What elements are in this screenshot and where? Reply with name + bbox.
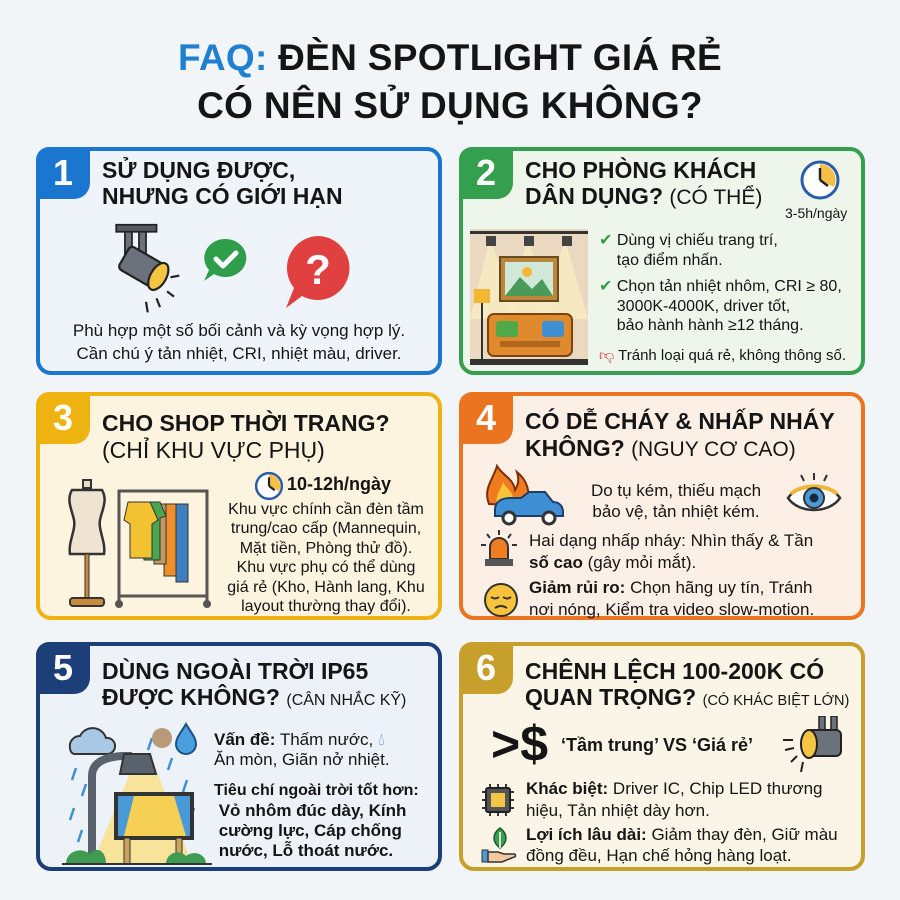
text 3: trung/cao cấp (Mannequin, — [231, 520, 421, 537]
text: differences: hiệu, Tản nhiệt dày hơn. — [526, 801, 710, 820]
text: reduce risk: Giảm rủi ro: Chọn hãng uy tín, Tránh — [529, 578, 812, 597]
text: criteria: Tiêu chí ngoài trời tốt hơn: — [214, 782, 419, 799]
heading 3: CHO SHOP THỜI TRANG? — [102, 410, 390, 436]
badge 1: 1 — [53, 152, 73, 193]
icon: clock small — [254, 472, 284, 500]
text: differences: Khác biệt: Driver IC, Chip LED thương — [526, 779, 823, 798]
icon: burning car — [486, 464, 564, 526]
bullet: specs — [599, 278, 842, 334]
text 3: layout thường thay đổi). — [241, 598, 411, 615]
icon: red question bubble: ? — [305, 246, 331, 293]
icon: spotlight small — [783, 716, 842, 772]
bullet: specs: bảo hành hành ≥12 tháng. — [617, 317, 804, 334]
text 3: Mặt tiền, Phòng thử đồ). — [240, 540, 412, 557]
text: reduce risk: nơi nóng, Kiểm tra video slow-motion. — [529, 600, 814, 619]
illustration: living room — [470, 229, 588, 365]
text: cause: Do tụ kém, thiếu mạch — [591, 481, 761, 500]
heading 3 — [102, 410, 390, 463]
heading 5: DÙNG NGOÀI TRỜI IP65 — [102, 658, 368, 684]
bullet: avoid: 👎︎ Tránh loại quá rẻ, không thông số. — [599, 347, 846, 364]
heading 3: (CHỈ KHU VỰC PHỤ) — [102, 437, 325, 463]
text 3 — [227, 501, 425, 615]
heading 1: NHƯNG CÓ GIỚI HẠN — [102, 183, 343, 209]
badge 3: 3 — [53, 397, 73, 438]
heading 4: KHÔNG? (NGUY CƠ CAO) — [525, 435, 796, 461]
text: cause: bảo vệ, tản nhiệt kém. — [592, 502, 760, 521]
title — [178, 36, 722, 126]
heading 5 — [102, 658, 406, 710]
title: FAQ: ĐÈN SPOTLIGHT GIÁ RẺ — [178, 37, 722, 78]
panel 5: outdoor IP65 — [36, 642, 442, 871]
icon: spotlight — [115, 224, 180, 312]
text: reduce risk — [529, 578, 814, 619]
text 1: Phù hợp một số bối cảnh và kỳ vọng hợp lý. — [73, 321, 405, 340]
text: problems: Ăn mòn, Giãn nở nhiệt. — [214, 750, 390, 769]
panel 6: price difference — [459, 642, 865, 871]
text 3: Khu vực chính cần đèn tầm — [228, 501, 424, 518]
heading 2 — [525, 157, 762, 209]
text 1 — [73, 321, 405, 363]
badge 1 — [36, 147, 90, 199]
bullet: specs: 3000K-4000K, driver tốt, — [617, 298, 790, 314]
badge 4: 4 — [476, 397, 496, 438]
clock label: 3-5h/ngày — [785, 205, 847, 221]
badge 4 — [459, 392, 513, 444]
hours label: 10-12h/ngày — [287, 474, 391, 494]
text: criteria — [214, 782, 419, 860]
heading 4 — [525, 408, 835, 461]
icon: green check bubble — [204, 239, 246, 281]
icon: tired face — [484, 583, 518, 617]
badge 2: 2 — [476, 152, 496, 193]
bullet: specs: ✔ Chọn tản nhiệt nhôm, CRI ≥ 80, — [599, 278, 842, 295]
panel 2: living room — [459, 147, 865, 375]
icon: clothes rack — [115, 490, 211, 608]
badge 5 — [36, 642, 90, 694]
heading 4: CÓ DỄ CHÁY & NHẤP NHÁY — [525, 408, 835, 434]
illustration: outdoor lamp in rain — [62, 722, 212, 865]
text: flicker — [529, 531, 813, 572]
text: flicker: Hai dạng nhấp nháy: Nhìn thấy & Tần — [529, 531, 813, 550]
heading 2: CHO PHÒNG KHÁCH — [525, 157, 756, 183]
heading 6 — [525, 658, 849, 710]
text: problems — [214, 730, 390, 769]
panel 4: fire & flicker — [459, 392, 865, 620]
heading 1: SỬ DỤNG ĐƯỢC, — [102, 157, 295, 183]
text: long-term benefits: đồng đều, Hạn chế hỏng hàng loạt. — [526, 846, 792, 865]
text: criteria: Vỏ nhôm đúc dày, Kính — [219, 801, 406, 820]
text 1: Cần chú ý tản nhiệt, CRI, nhiệt màu, driver. — [76, 344, 402, 363]
title: CÓ NÊN SỬ DỤNG KHÔNG? — [197, 85, 703, 126]
icon: eye — [786, 473, 842, 512]
text: differences — [526, 779, 823, 820]
panel 1: limited use — [36, 147, 442, 375]
icon: mannequin — [68, 479, 106, 607]
heading 6: QUAN TRỌNG? (CÓ KHÁC BIỆT LỚN) — [525, 684, 849, 710]
heading 1 — [102, 157, 343, 209]
badge 6: 6 — [476, 647, 496, 688]
heading 5: ĐƯỢC KHÔNG? (CÂN NHẮC KỸ) — [102, 684, 406, 710]
text 3: Khu vực phụ có thể dùng — [237, 559, 415, 576]
badge 5: 5 — [53, 647, 73, 688]
text: criteria: nước, Lỗ thoát nước. — [219, 841, 393, 860]
text: long-term benefits: Lợi ích lâu dài: Giảm thay đèn, Giữ màu — [526, 825, 838, 844]
icon: chip — [482, 784, 514, 816]
heading 2: DÂN DỤNG? (CÓ THỂ) — [525, 183, 762, 209]
panel 3: fashion shop — [36, 392, 442, 620]
text: criteria: cường lực, Cáp chống — [219, 821, 402, 840]
text: cause — [591, 481, 761, 521]
bullet: decorative use: ✔ Dùng vị chiếu trang trí, — [599, 232, 778, 249]
icon: clock — [800, 160, 840, 200]
badge 2 — [459, 147, 513, 199]
text: mid vs cheap: ‘Tầm trung’ VS ‘Giá rẻ’ — [561, 735, 753, 755]
text: problems: Vấn đề: Thấm nước, 💧︎ — [214, 730, 385, 749]
bullets 2 — [599, 232, 846, 364]
icon: leaf in hand — [482, 827, 516, 863]
text: long-term benefits — [526, 825, 838, 865]
bullet: decorative use: tạo điểm nhấn. — [617, 252, 723, 269]
icon: red question bubble — [286, 236, 350, 308]
heading 6: CHÊNH LỆCH 100-200K CÓ — [525, 658, 824, 684]
icon: siren — [481, 530, 517, 566]
badge 6 — [459, 642, 513, 694]
badge 3 — [36, 392, 90, 444]
text: flicker: số cao (gây mỏi mắt). — [529, 553, 696, 572]
text 3: giá rẻ (Kho, Hành lang, Khu — [227, 579, 425, 596]
bullet: decorative use — [599, 232, 778, 269]
icon: >$: >$ — [491, 716, 548, 772]
